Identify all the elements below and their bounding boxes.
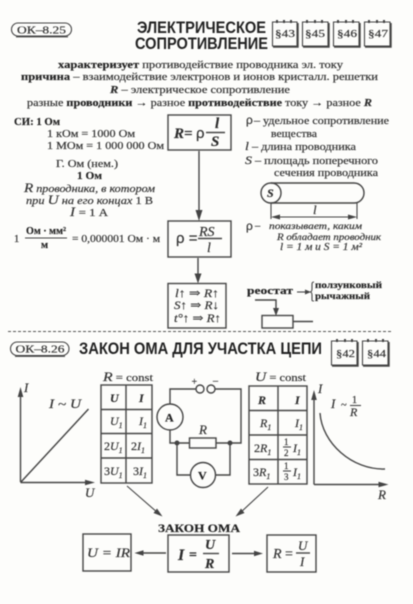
circuit diagram: A [165, 410, 174, 424]
rho explanation: l = 1 м и S = 1 м² [280, 242, 363, 253]
table: R const: 2U [104, 439, 119, 453]
formula box: R = rho l/S: R= [173, 126, 193, 142]
units of resistance: I = 1 А [69, 204, 108, 219]
graph: I vs R: R [349, 405, 358, 419]
formula box: rho = RS/l [168, 221, 231, 257]
rheostat types [247, 280, 383, 302]
formula box: R = U/I: U [298, 538, 309, 553]
table: U const: 3R [253, 465, 266, 479]
textbook references 43 45 46 47: §43 [275, 28, 296, 40]
units of resistance [14, 117, 164, 219]
definitions of rho, l, S: вещества [271, 129, 317, 140]
formula box: rho = RS/l: ρ = [176, 230, 198, 247]
label: OK-8.26: ОК–8.26 [16, 344, 65, 356]
circuit diagram: – [212, 376, 219, 387]
definitions of rho, l, S: – удельное сопротивление [253, 116, 389, 127]
table: R const: 1 [119, 446, 123, 455]
graph: I vs U: I [23, 380, 29, 395]
units of resistance: 1 кОм = 1000 Ом [47, 129, 135, 140]
dependence box: S↑ ⇒ R↓ [174, 298, 219, 312]
formula box: I = U/R: = [189, 548, 197, 563]
title: electrical resistance: ЭЛЕКТРИЧЕСКОЕ [137, 19, 266, 37]
units of resistance: при U на его концах 1 В [26, 192, 153, 207]
units of resistance: СИ: 1 Ом [14, 117, 60, 128]
circuit diagram: V [198, 468, 207, 482]
rheostat types: ползунковый [315, 280, 383, 291]
dependence box: t°↑ ⇒ R↑ [174, 311, 221, 325]
formula box: R = U/I [267, 535, 316, 572]
formula box: R = U/I: I [299, 554, 305, 569]
textbook references 43 45 46 47 [272, 20, 391, 47]
graph: I vs R: 1 [352, 395, 357, 406]
table: R const: 1 [141, 446, 145, 455]
table: R const: 3I [133, 464, 143, 478]
table: U const: 1 [284, 437, 288, 447]
table: R const: 1 [143, 471, 147, 480]
table: U const: 2R [254, 441, 267, 455]
dependence box [168, 284, 226, 328]
rho explanation [246, 219, 382, 253]
units of resistance: 1 МОм = 1 000 000 Ом [47, 141, 164, 152]
graph: I vs R: R [377, 487, 386, 502]
formula box: I = U/R [168, 535, 229, 572]
arrow down [194, 258, 202, 284]
definitions of rho, l, S: l – длина проводника [245, 139, 356, 153]
units of resistance: 1 Ом [77, 171, 102, 182]
graph: I vs R [311, 381, 388, 502]
units of resistance: Г. Ом (нем.) [56, 159, 119, 170]
table: U const: 1 [267, 423, 271, 432]
formula box: I = U/R: U [205, 538, 216, 553]
rheostat types: рычажный [315, 291, 371, 302]
table: U const: 1 [297, 448, 301, 457]
circuit diagram [157, 376, 241, 488]
table: U const [249, 369, 307, 484]
conductor cylinder diagram: S [267, 186, 274, 200]
formula box: U = IR [83, 534, 131, 571]
table: U const: 1 [284, 461, 288, 471]
table: R const: 1 [143, 421, 147, 430]
table: U const: U = const [255, 369, 306, 384]
textbook references 43 45 46 47: §45 [305, 28, 326, 40]
circuit diagram: + [192, 377, 198, 388]
table: U const: I [295, 416, 299, 430]
formula box: R = U/I: R [272, 547, 282, 562]
table: R const: U [110, 391, 120, 405]
graph: I vs U: U [85, 485, 96, 500]
table: U const: 1 [297, 472, 301, 481]
rho explanation: R обладает проводник [276, 232, 382, 243]
definition text: характеризует противодействие проводника эл. току [58, 60, 344, 71]
formula box: I = U/R: R [204, 557, 214, 572]
table: R const: 1 [119, 471, 123, 480]
table: R const: U [110, 414, 119, 428]
label: OK-8.26 [10, 342, 69, 356]
table: R const [101, 369, 153, 483]
table: U const: 1 [267, 448, 271, 457]
resistivity unit conversion [14, 226, 160, 251]
graph: I vs R: I [317, 381, 323, 396]
formula box: R = U/I: = [285, 547, 293, 562]
conductor cylinder diagram: l [313, 202, 317, 217]
graph: I vs U: I ~ U [48, 396, 83, 411]
heading: Ohm's law: ЗАКОН ОМА [158, 521, 240, 535]
graph: I vs R: I [330, 396, 336, 411]
rho explanation: показывает, каким [269, 222, 362, 232]
formula box: R = rho l/S: ρ [196, 125, 205, 142]
formula box: R = rho l/S: l [215, 116, 220, 132]
definition text: причина – взаимодействие электронов и ионов кристалл. решетки [21, 72, 378, 83]
definition text: разные проводники → разное противодействие току → разное R [27, 98, 372, 109]
definitions of rho, l, S [245, 113, 389, 179]
label: OK-8.25: ОК–8.25 [17, 24, 67, 36]
formula box: R = rho l/S: S [211, 134, 219, 150]
table: U const: I [294, 393, 301, 407]
label: OK-8.25 [12, 23, 72, 37]
table: R const: I [139, 414, 143, 428]
conductor cylinder diagram [261, 183, 364, 220]
table: R const: 2I [131, 439, 141, 453]
table: U const: I [293, 441, 297, 455]
table: R const: R = const [102, 369, 153, 384]
circuit diagram: R [198, 422, 207, 437]
table: U const: 1 [266, 472, 270, 481]
arrow down [196, 151, 202, 221]
definitions of rho, l, S: S – площадь поперечного [245, 153, 378, 167]
units of resistance: R проводника, в котором [23, 180, 155, 195]
definition text [21, 60, 378, 109]
textbook references 42 44: §42 [336, 348, 355, 360]
rho explanation: – [254, 221, 261, 232]
resistivity unit conversion: м [41, 240, 48, 251]
formula box: rho = RS/l: l [207, 241, 211, 256]
rheostat symbol [255, 300, 313, 328]
title: electrical resistance: СОПРОТИВЛЕНИЕ [135, 35, 268, 53]
table: U const: I [293, 465, 297, 479]
formula box: R = rho l/S [168, 115, 231, 150]
dependence box: l↑ ⇒ R↑ [175, 286, 219, 300]
formula box: rho = RS/l: RS [198, 225, 215, 240]
resistivity unit conversion: = 0,000001 Ом · м [72, 234, 160, 245]
textbook references 42 44 [332, 339, 389, 366]
graph: I vs U [18, 380, 96, 500]
rho explanation: ρ [246, 219, 253, 233]
arrow right [232, 551, 263, 556]
textbook references 43 45 46 47: §46 [337, 28, 358, 40]
formula box: I = U/R: I [177, 547, 185, 564]
formula box: U = IR: U = IR [87, 545, 130, 560]
title: electrical resistance [135, 19, 268, 53]
resistivity unit conversion: Ом · мм² [26, 226, 66, 237]
table: R const: 1 [119, 421, 123, 430]
definition text: R – электрическое сопротивление [109, 85, 290, 96]
table: U const: 2 [284, 448, 288, 458]
table: R const: I [138, 391, 145, 405]
resistivity unit conversion: 1 [14, 234, 19, 245]
table: U const: 1 [299, 423, 303, 432]
graph: I vs R: ~ [341, 400, 347, 411]
textbook references 43 45 46 47: §47 [368, 28, 389, 40]
rheostat types: реостат [247, 286, 294, 297]
table: U const: R [257, 393, 266, 407]
table: R const: 3U [104, 464, 119, 478]
arrows to Ohm's law [127, 486, 268, 516]
definitions of rho, l, S: сечения проводника [274, 168, 378, 179]
definitions of rho, l, S: ρ [246, 113, 253, 127]
table: U const: 3 [284, 472, 289, 482]
table: U const: R [260, 416, 267, 430]
arrow left [134, 550, 166, 556]
textbook references 42 44: §44 [367, 348, 387, 360]
title: Ohm's law: ЗАКОН ОМА ДЛЯ УЧАСТКА ЦЕПИ [79, 340, 322, 358]
